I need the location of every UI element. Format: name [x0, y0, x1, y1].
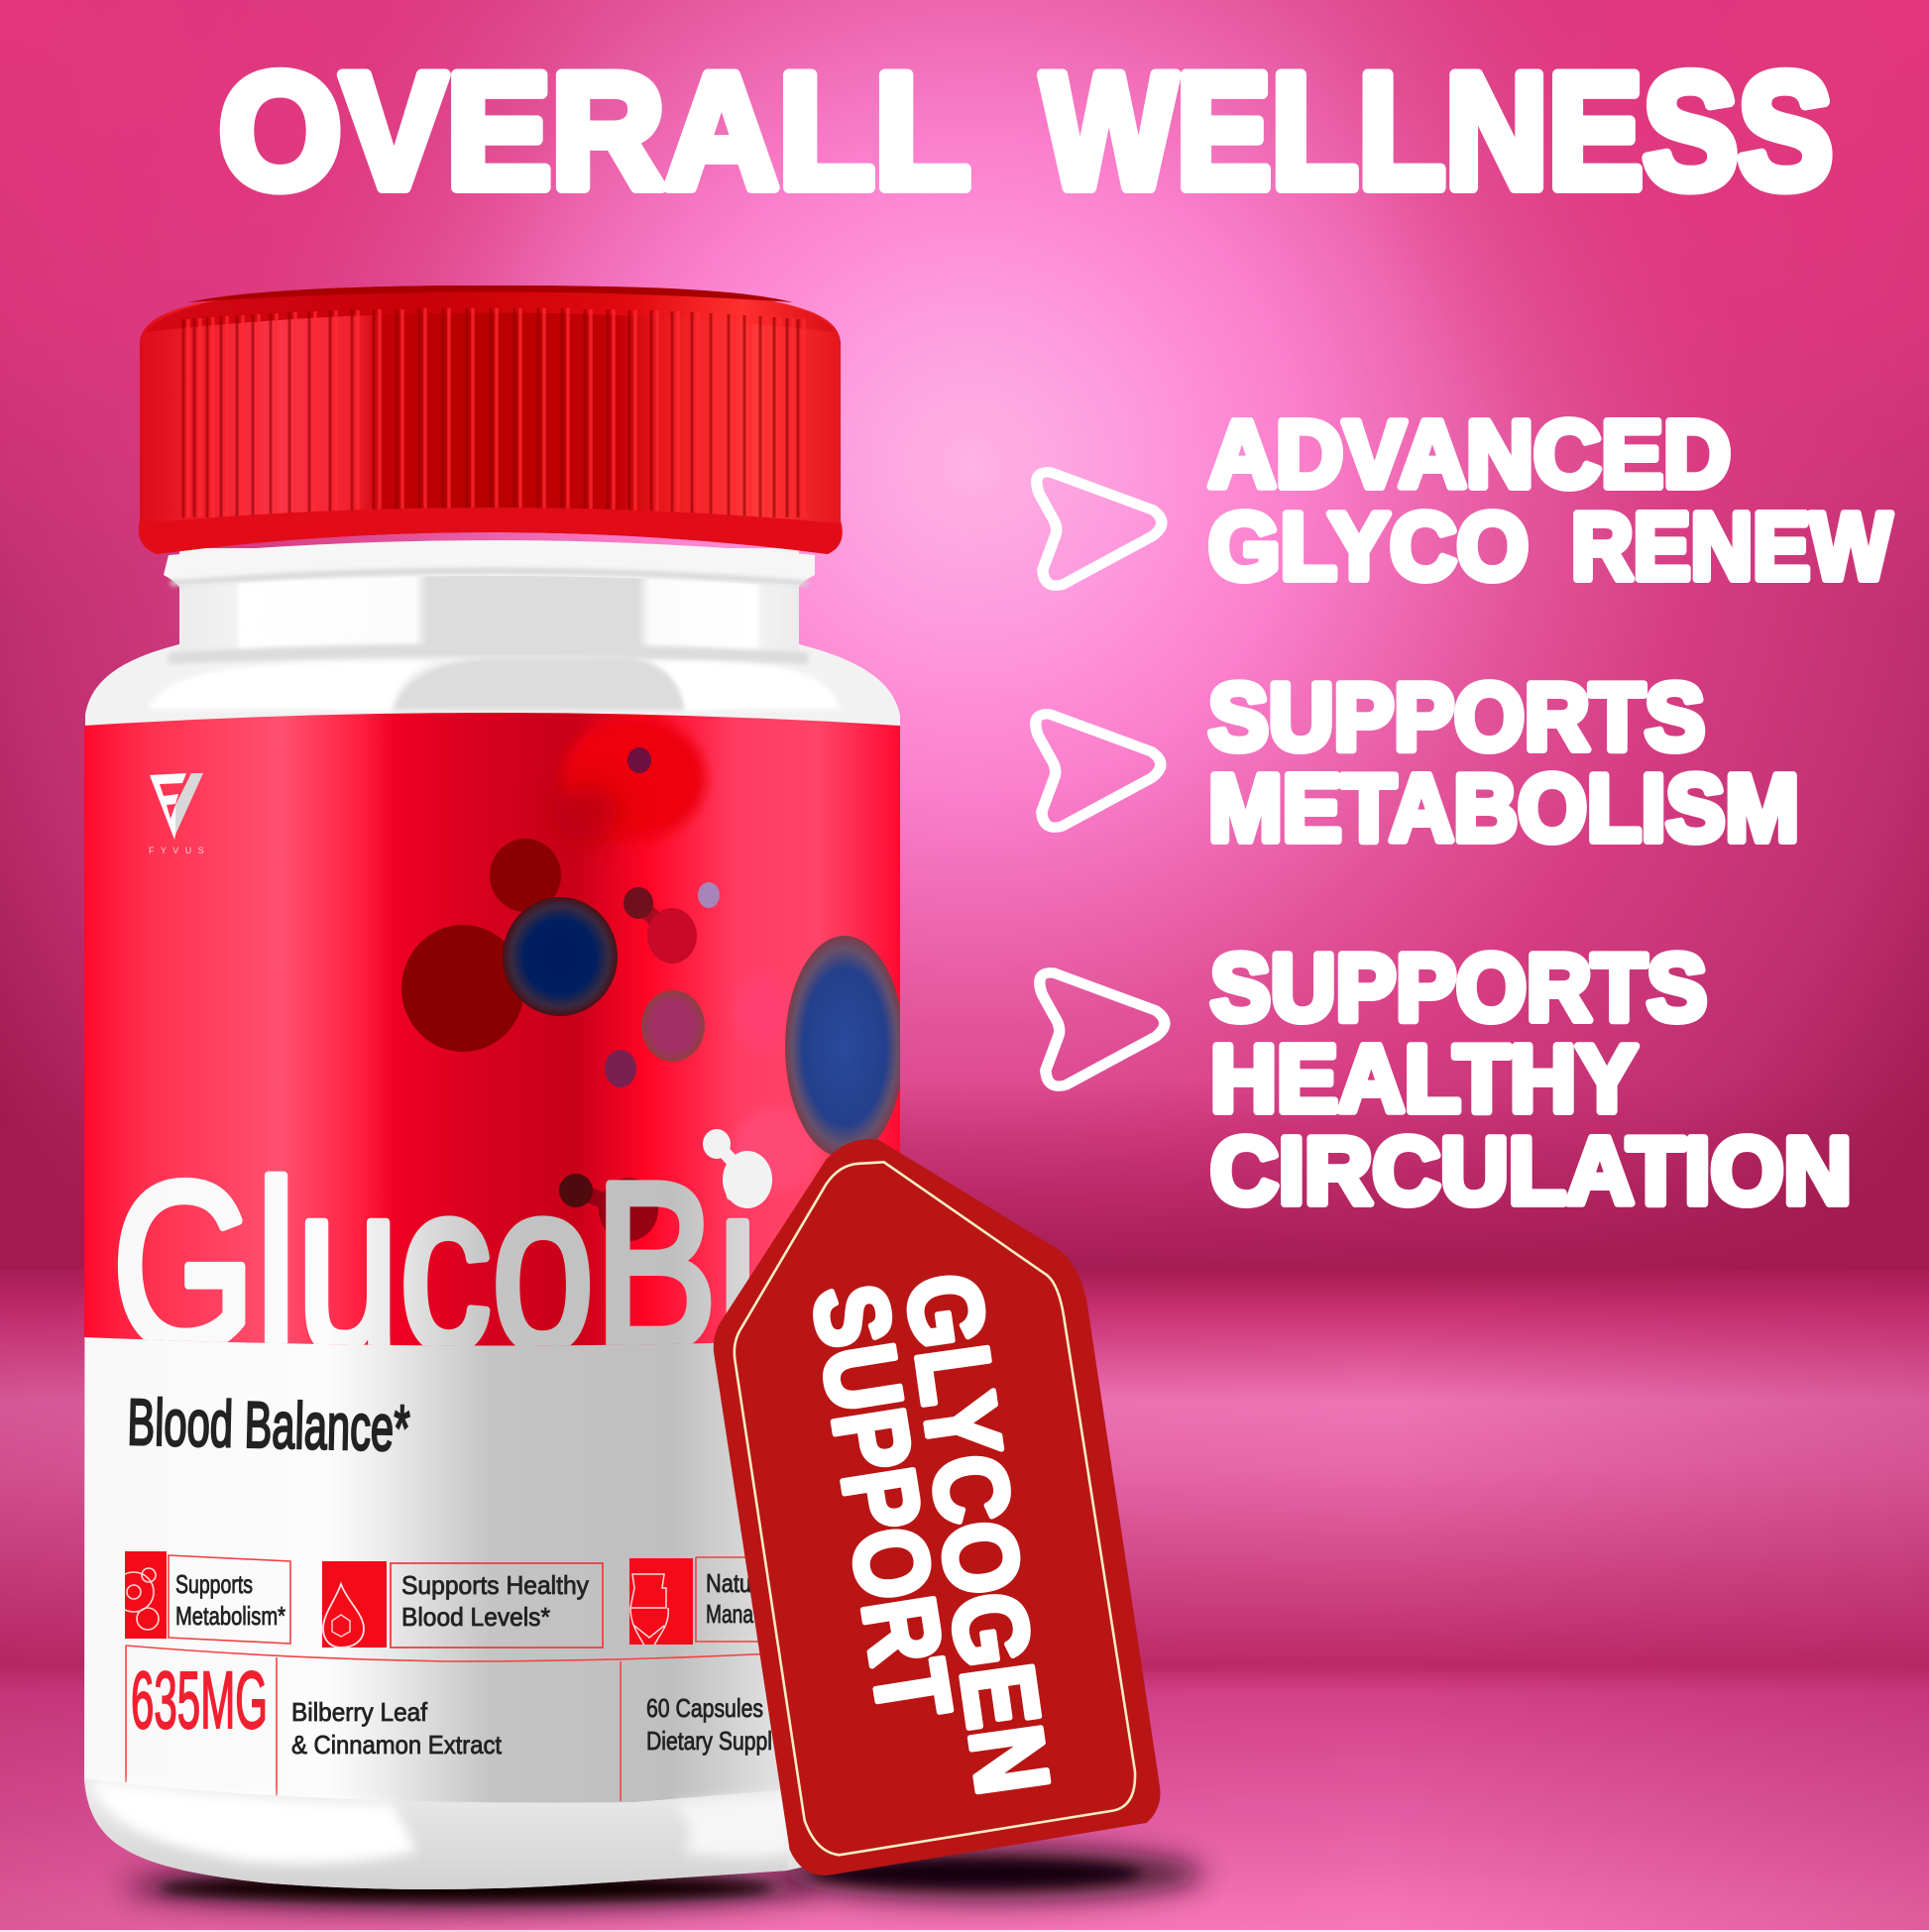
feature: supports healthy blood levels: Supports Healthy	[401, 1570, 589, 1600]
tag shape	[714, 1139, 1161, 1875]
text: advanced glyco renew: GLYCO	[1208, 494, 1529, 600]
feature: supports healthy blood levels: Blood Levels*	[401, 1602, 550, 1632]
title: OVERALL	[219, 40, 970, 222]
feature: supports healthy blood levels	[322, 1561, 603, 1648]
text: supports healthy circulation	[1210, 935, 1852, 1224]
title	[219, 40, 1833, 222]
bottle	[84, 285, 904, 1889]
text: advanced glyco renew	[1208, 401, 1891, 600]
bottle body	[84, 548, 900, 1889]
ingredients: Bilberry Leaf	[291, 1697, 428, 1727]
feature: supports metabolism	[114, 1551, 290, 1644]
info table rules	[126, 1646, 773, 1801]
tag text	[790, 1267, 1071, 1801]
icon: white molecule on product name	[703, 1129, 772, 1208]
icon: blood drop	[322, 1561, 387, 1648]
bottle neck and shoulder	[85, 540, 900, 729]
text: supports healthy circulation: CIRCULATION	[1210, 1118, 1852, 1224]
tag stitch line	[735, 1162, 1135, 1855]
feature: natural management (partly hidden): Natu	[706, 1568, 751, 1598]
tag text: SUPPORT	[790, 1277, 972, 1726]
capsule count: Dietary Suppl	[646, 1726, 772, 1756]
tag text: GLYCOGEN	[883, 1267, 1071, 1801]
icon: arrow 1	[1037, 472, 1162, 586]
title: WELLNESS	[1042, 40, 1833, 222]
text: supports healthy circulation: SUPPORTS	[1210, 935, 1707, 1041]
icon: arrow 2	[1036, 714, 1161, 828]
red label band	[84, 713, 900, 1346]
feature: natural management (partly hidden): Mana	[706, 1599, 753, 1629]
capsule count: 60 Capsules	[646, 1693, 763, 1723]
dosage: 635MG	[131, 1655, 268, 1746]
text: supports metabolism	[1208, 664, 1799, 861]
ingredients: & Cinnamon Extract	[291, 1730, 503, 1760]
feature: supports metabolism: Supports	[175, 1569, 253, 1599]
ingredients	[291, 1697, 503, 1760]
product subtitle: Blood Balance*	[127, 1385, 410, 1464]
text: advanced glyco renew: RENEW	[1571, 494, 1891, 600]
brand logo: fyvus	[149, 773, 210, 855]
label artwork: molecules	[401, 717, 904, 1241]
product name: GlucoBi	[112, 1133, 758, 1399]
bottle cap	[139, 285, 843, 554]
icon: molecule	[125, 1551, 167, 1639]
icon: arrow 3	[1040, 972, 1165, 1086]
ground shadow	[124, 1846, 1204, 1910]
brand logo: fyvus: FYVUS	[149, 846, 210, 855]
text: supports healthy circulation: HEALTHY	[1210, 1026, 1638, 1132]
feature: natural management (partly hidden)	[629, 1556, 758, 1645]
feature: supports metabolism: Metabolism*	[175, 1601, 285, 1631]
text: advanced glyco renew: ADVANCED	[1208, 401, 1731, 508]
text: supports metabolism: SUPPORTS	[1208, 664, 1705, 770]
tag: glycogen support	[714, 1139, 1161, 1875]
capsule count	[646, 1693, 772, 1756]
icon: waist	[629, 1558, 693, 1646]
bottle base reflection	[84, 1778, 793, 1889]
text: supports metabolism: METABOLISM	[1208, 755, 1799, 861]
